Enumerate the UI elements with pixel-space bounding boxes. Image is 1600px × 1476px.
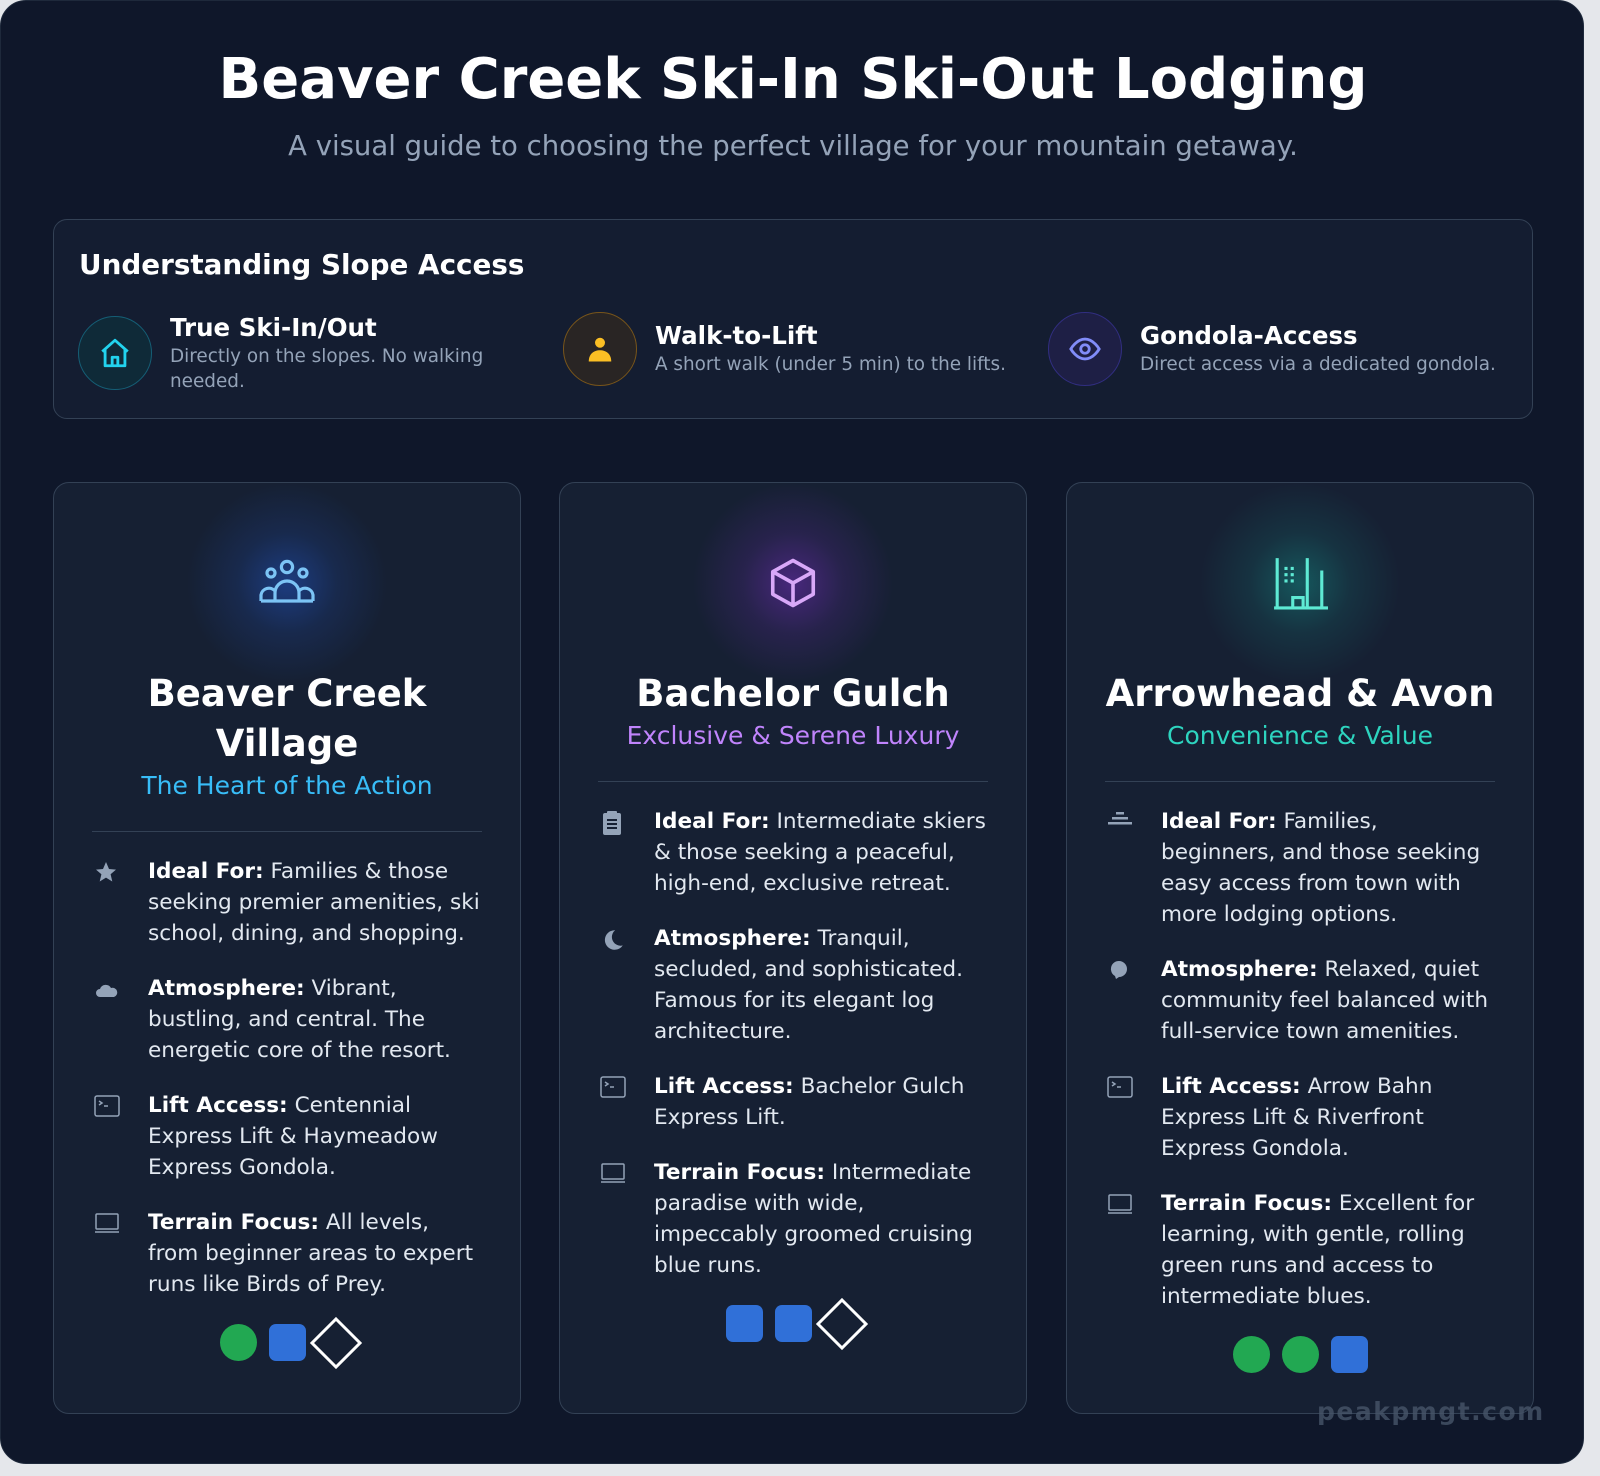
details list: Lift Access: Arrow Bahn Express Lift & Riverfront Express Gondola. [1161,1074,1432,1161]
item: walk-to-lift: A short walk (under 5 min) to the lifts. [655,354,1006,374]
item: walk-to-lift: Walk-to-Lift [655,320,818,350]
icon: cube [673,483,913,683]
panel: slope access [53,219,1533,419]
details list: Terrain Focus: Excellent for learning, with gentle, rolling green runs and access to intermediate blues. [1161,1191,1474,1309]
details list: Ideal For: Families & those seeking premier amenities, ski school, dining, and shopping. [148,859,480,946]
heading: Arrowhead & Avon [1106,672,1494,715]
item: gondola-access: Direct access via a dedicated gondola. [1140,354,1496,374]
item: true ski-in/out: needed. [170,371,245,392]
difficulty icons [1233,1336,1368,1373]
difficulty icons [726,1298,868,1350]
details list: Lift Access: Centennial Express Lift & Haymeadow Express Gondola. [148,1093,438,1180]
tagline: Exclusive & Serene Luxury [627,721,959,750]
panel: Beaver Creek Village [53,482,521,1414]
details list [1107,809,1488,1309]
heading [148,672,427,765]
details list: Atmosphere: Relaxed, quiet community feel balanced with full-service town amenities. [1161,957,1488,1044]
item: gondola-access [1048,312,1496,386]
difficulty icons [220,1317,362,1369]
watermark: peakpmgt.com [1317,1397,1545,1426]
heading: slope access: Understanding Slope Access [79,248,524,281]
heading: Village [216,722,358,765]
panel: Arrowhead & Avon [1066,482,1534,1414]
details list [600,809,986,1278]
subtitle: A visual guide to choosing the perfect village for your mountain getaway. [288,130,1298,162]
heading: Bachelor Gulch [636,672,950,715]
details list: Lift Access: Bachelor Gulch Express Lift. [654,1074,964,1130]
title: Beaver Creek Ski-In Ski-Out Lodging [219,47,1367,112]
tagline: Convenience & Value [1167,721,1433,750]
heading: Beaver Creek [148,672,426,715]
item: true ski-in/out: Directly on the slopes. No walking [170,346,483,367]
details list: Atmosphere: Vibrant, bustling, and central. The energetic core of the resort. [148,976,451,1063]
icon: person [563,312,637,386]
icon: house [78,316,152,390]
tagline: The Heart of the Action [141,771,433,800]
item: walk-to-lift [563,312,1006,386]
icon: people [167,483,407,683]
panel: Bachelor Gulch [559,482,1027,1414]
icon: building [1180,483,1420,683]
details list [94,859,480,1297]
details list: Terrain Focus: Intermediate paradise with wide, impeccably groomed cruising blue runs. [654,1160,973,1278]
item: true ski-in/out [78,313,483,392]
details list: Atmosphere: Tranquil, secluded, and sophisticated. Famous for its elegant log architecture. [654,926,963,1044]
details list: Terrain Focus: All levels, from beginner areas to expert runs like Birds of Prey. [148,1210,473,1297]
details list: Ideal For: Intermediate skiers & those seeking a peaceful, high-end, exclusive retreat. [654,809,986,896]
details list: Ideal For: Families, beginners, and those seeking easy access from town with more lodging options. [1161,809,1480,927]
icon: eye [1048,312,1122,386]
item: true ski-in/out: True Ski-In/Out [170,313,377,342]
item: gondola-access: Gondola-Access [1140,320,1358,350]
